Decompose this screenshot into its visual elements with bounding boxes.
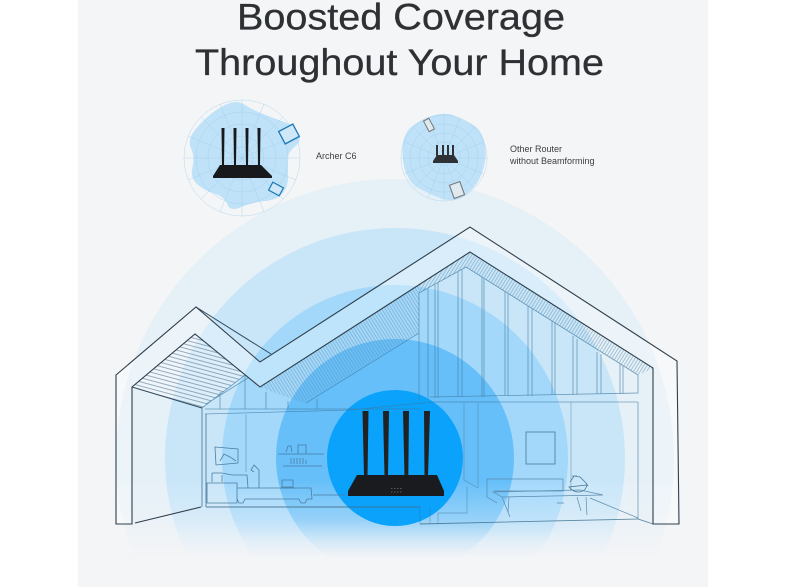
signal coverage rings — [116, 179, 674, 565]
title — [195, 0, 604, 83]
comparison: Archer C6 coverage — [184, 100, 357, 216]
right room: coffee table — [493, 490, 638, 518]
label: other router: Other Router — [510, 144, 562, 154]
left roof hatching — [132, 334, 245, 408]
roof edge lines — [132, 307, 271, 408]
polar grid: other router — [401, 115, 487, 201]
antennas — [362, 411, 430, 476]
router body — [348, 475, 444, 496]
right room: bowl of fruit — [569, 476, 588, 492]
left room: laptop — [280, 480, 295, 488]
left room: sofa — [207, 473, 347, 503]
comparison: other router coverage — [401, 114, 595, 201]
title: Throughout Your Home — [195, 42, 604, 83]
router icon: Archer C6 — [213, 128, 272, 178]
device icon: phone — [424, 118, 434, 132]
central roof hatching — [260, 252, 470, 403]
left room: wall picture — [215, 447, 238, 465]
house illustration — [116, 227, 679, 524]
device icon: tablet — [279, 124, 299, 144]
upper windows — [202, 267, 638, 519]
front indicator lights — [391, 488, 403, 492]
room structure — [202, 402, 653, 524]
device icon: laptop — [269, 182, 283, 196]
label: other router: without Beamforming — [509, 156, 595, 166]
right roof hatching — [419, 252, 654, 375]
outer outline — [116, 227, 679, 524]
wall strip — [116, 227, 677, 524]
left room: floor lamp — [251, 465, 259, 488]
coverage blob: Archer C6 — [190, 102, 300, 209]
right room: sofa — [487, 479, 564, 503]
left room: wall shelves — [278, 445, 324, 466]
label: Archer C6: Archer C6 — [316, 151, 357, 161]
main router — [348, 411, 444, 496]
device icon: tablet — [449, 182, 465, 198]
left roof hatch lines — [132, 334, 245, 408]
label: other router — [509, 144, 595, 166]
router icon: other router — [433, 145, 458, 163]
polar grid: Archer C6 — [184, 100, 300, 216]
right room: wall picture — [526, 432, 555, 464]
coverage blob: other router — [402, 114, 486, 200]
